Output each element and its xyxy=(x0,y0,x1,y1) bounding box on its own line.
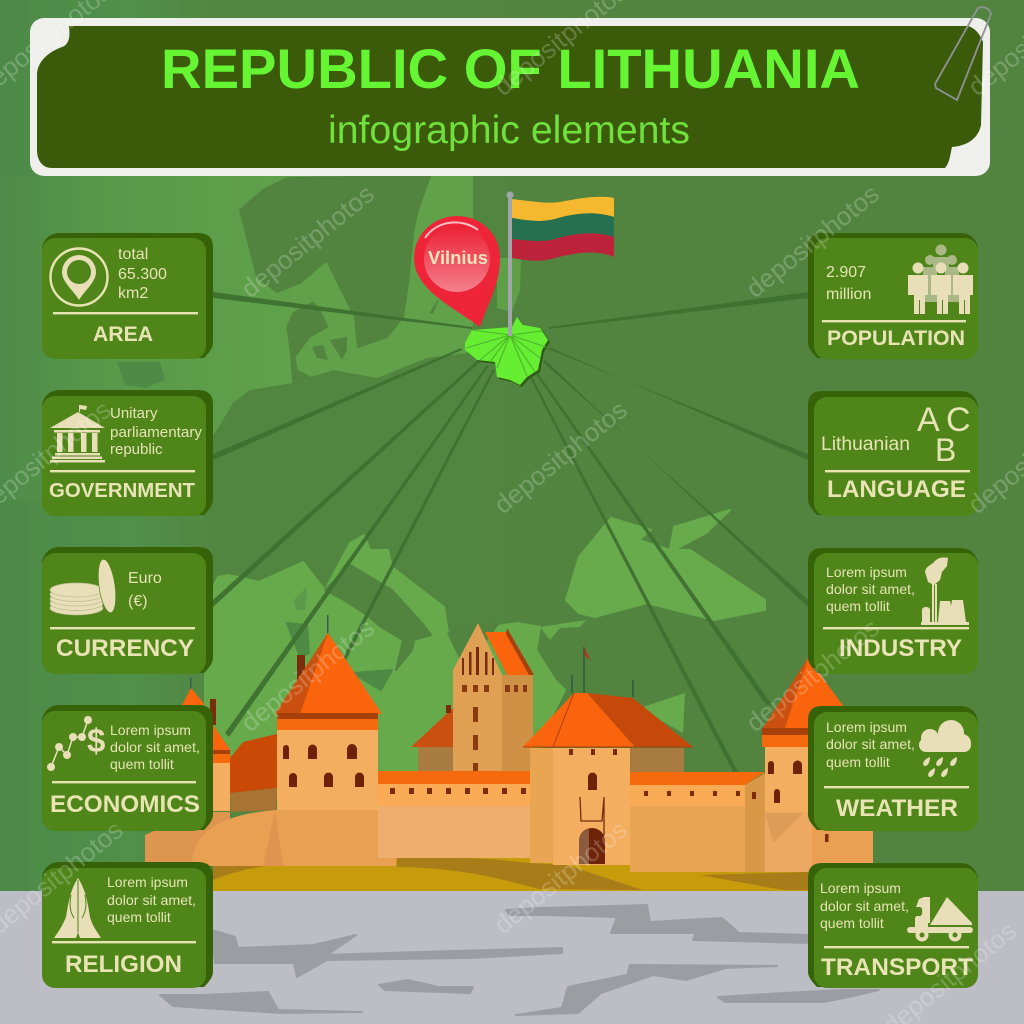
icon: dump truck xyxy=(907,897,973,942)
connector rays xyxy=(213,292,808,772)
castle xyxy=(145,615,873,891)
population value: 2.907 xyxy=(826,264,866,281)
currency value xyxy=(128,570,162,610)
government value xyxy=(110,405,203,458)
Lithuania map shape xyxy=(465,317,550,387)
weather text xyxy=(826,719,915,770)
watermarks: depositphotos xyxy=(235,612,380,738)
header banner xyxy=(30,7,991,176)
government value: parliamentary xyxy=(110,424,203,441)
map of Europe xyxy=(0,176,765,775)
religion text: dolor sit amet, xyxy=(107,892,196,908)
area value: total xyxy=(118,246,148,263)
industry text: quem tollit xyxy=(826,598,890,614)
icon: factory xyxy=(921,557,969,625)
label: government: GOVERNMENT xyxy=(49,480,196,502)
population value xyxy=(826,264,871,303)
watermarks: depositphotos xyxy=(740,612,885,738)
label: weather: WEATHER xyxy=(836,795,958,822)
area value: 65.300 xyxy=(118,266,167,283)
religion text: Lorem ipsum xyxy=(107,874,188,890)
label: area: AREA xyxy=(93,323,153,346)
government value: republic xyxy=(110,441,163,458)
religion text: quem tollit xyxy=(107,909,171,925)
government value: Unitary xyxy=(110,405,158,422)
title: REPUBLIC OF LITHUANIA xyxy=(161,37,860,100)
transport text: Lorem ipsum xyxy=(820,880,901,896)
left small tower xyxy=(182,678,231,811)
currency value: Euro xyxy=(128,570,162,587)
economics text xyxy=(110,722,200,772)
transport text: dolor sit amet, xyxy=(820,898,909,914)
area value xyxy=(118,246,167,302)
panel: population xyxy=(808,233,978,359)
population value: million xyxy=(826,286,871,303)
location pin: Vilnius xyxy=(414,216,500,327)
industry text: Lorem ipsum xyxy=(826,564,907,580)
icon: location pin xyxy=(50,248,108,306)
transport text xyxy=(820,880,909,931)
label: transport: TRANSPORT xyxy=(821,954,973,981)
grass mound xyxy=(213,858,813,891)
paper clip xyxy=(935,7,991,100)
subtitle: infographic elements xyxy=(328,109,690,152)
icon: coins xyxy=(50,558,119,615)
economics text: quem tollit xyxy=(110,756,174,772)
panel: currency xyxy=(42,547,213,674)
left wall xyxy=(230,734,277,793)
religion text xyxy=(107,874,196,925)
watermarks: depositphotos xyxy=(740,178,885,304)
weather text: dolor sit amet, xyxy=(826,736,915,752)
main left tower xyxy=(275,615,382,810)
flag of Lithuania xyxy=(506,192,614,336)
road cracks xyxy=(160,905,879,1015)
gate building xyxy=(523,646,693,865)
weather text: quem tollit xyxy=(826,754,890,770)
economics text: dolor sit amet, xyxy=(110,739,200,755)
panel: economics xyxy=(42,705,213,831)
currency value: (€) xyxy=(128,593,148,610)
panel: transport xyxy=(808,863,978,988)
panel: weather xyxy=(808,706,978,831)
icon: praying hands xyxy=(54,878,101,938)
icon: chart and dollar xyxy=(47,716,105,771)
economics text: Lorem ipsum xyxy=(110,722,191,738)
panel: language xyxy=(808,391,978,516)
icon: people xyxy=(908,244,973,314)
industry text: dolor sit amet, xyxy=(826,581,915,597)
castle base left xyxy=(145,812,230,862)
icon: letters: C xyxy=(946,401,971,439)
language value: Lithuanian xyxy=(821,434,910,455)
label: language: LANGUAGE xyxy=(827,476,966,503)
transport text: quem tollit xyxy=(820,915,884,931)
ground road xyxy=(0,891,1024,1024)
icon: letters: B xyxy=(935,432,956,468)
weather text: Lorem ipsum xyxy=(826,719,907,735)
label: religion: RELIGION xyxy=(65,951,182,978)
area value: km2 xyxy=(118,285,148,302)
label: industry: INDUSTRY xyxy=(839,635,962,662)
watermarks: depositphotos xyxy=(488,814,633,940)
industry text xyxy=(826,564,915,614)
panel: industry xyxy=(808,548,978,674)
right tower xyxy=(762,658,873,872)
lower right wall xyxy=(630,748,765,872)
panel: religion xyxy=(42,862,213,988)
icon: letters xyxy=(917,401,971,468)
label: population: POPULATION xyxy=(827,327,965,350)
rear wing and keep xyxy=(411,623,534,772)
label: economics: ECONOMICS xyxy=(50,791,200,818)
icon: parliament building xyxy=(50,405,105,462)
label: Vilnius: Vilnius xyxy=(428,248,488,268)
icon: rain cloud xyxy=(919,720,971,777)
watermarks: depositphotos xyxy=(235,178,380,304)
panel: government xyxy=(42,390,213,516)
panel: area xyxy=(42,233,213,359)
watermarks: depositphotos xyxy=(488,394,633,520)
label: currency: CURRENCY xyxy=(56,635,194,662)
icon: chart and dollar: $ xyxy=(87,722,105,759)
central wall xyxy=(378,771,533,858)
icon: letters: A xyxy=(917,401,940,439)
